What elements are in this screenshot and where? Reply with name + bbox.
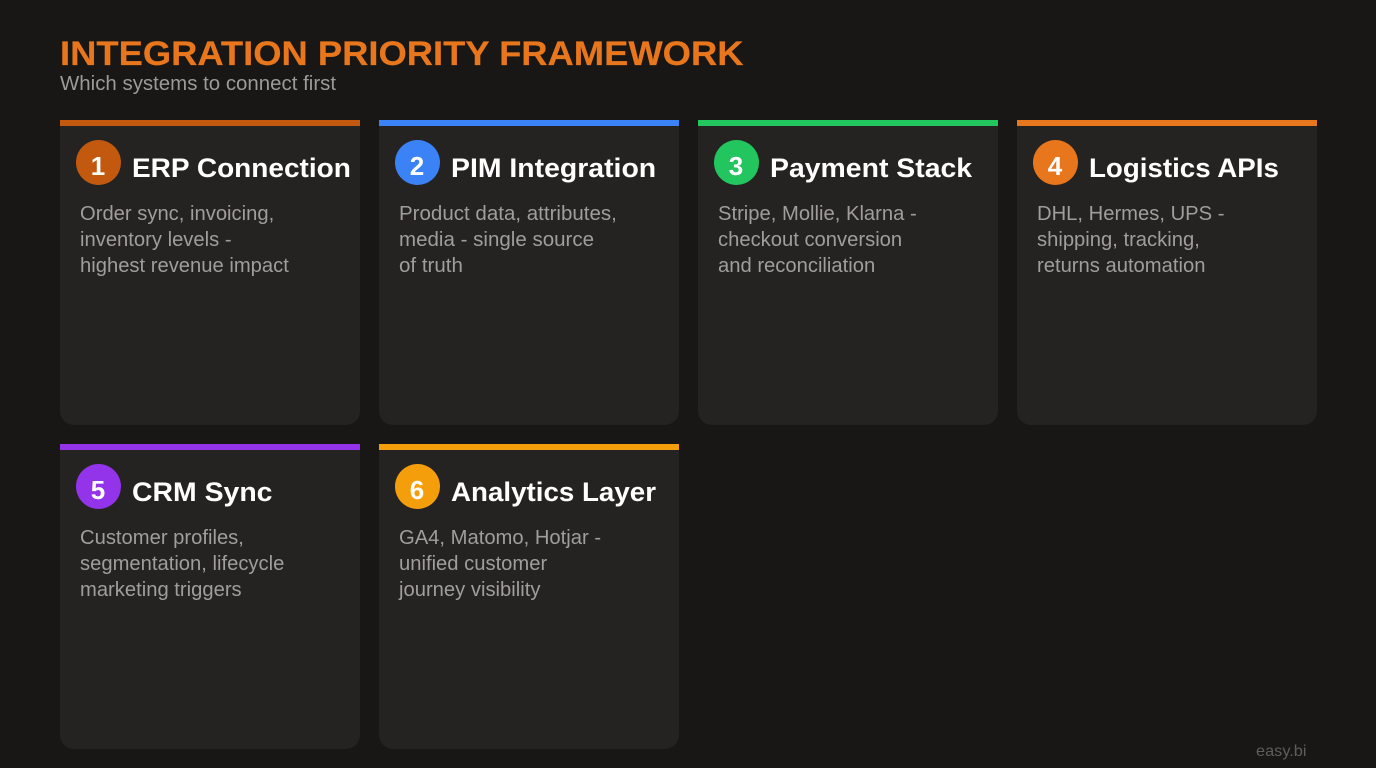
panel: ERP Connection xyxy=(60,120,360,425)
text: Analytics description: journey visibility xyxy=(399,579,540,601)
panel: CRM Sync xyxy=(60,444,360,749)
text: Payment description: and reconciliation xyxy=(718,255,875,277)
text: PIM description: media - single source xyxy=(399,229,594,251)
text: CRM description: segmentation, lifecycle xyxy=(80,553,284,575)
brand mark: easy.bi xyxy=(1256,743,1307,760)
title: INTEGRATION PRIORITY FRAMEWORK xyxy=(60,35,743,73)
icon: number 5 xyxy=(76,464,121,509)
icon: number 4: 4 xyxy=(1048,151,1062,181)
panel: Analytics Layer xyxy=(379,444,679,749)
text: ERP description: Order sync, invoicing, xyxy=(80,203,274,225)
text: Logistics description: shipping, tracking, xyxy=(1037,229,1200,251)
text: Logistics description xyxy=(1037,203,1224,277)
icon: number 4 xyxy=(1033,140,1078,185)
icon: number 2 xyxy=(395,140,440,185)
panel: Payment Stack xyxy=(698,120,998,425)
text: Payment description xyxy=(718,203,917,277)
panel: PIM Integration xyxy=(379,120,679,425)
icon: number 3: 3 xyxy=(729,151,743,181)
text: PIM description xyxy=(399,203,617,277)
icon: number 1 xyxy=(76,140,121,185)
text: ERP description xyxy=(80,203,289,277)
subtitle: Which systems to connect first xyxy=(60,73,336,95)
text: ERP description: highest revenue impact xyxy=(80,255,289,277)
icon: number 5: 5 xyxy=(91,475,105,505)
heading: Payment Stack: Payment Stack xyxy=(770,153,972,183)
heading: PIM Integration: PIM Integration xyxy=(451,153,656,183)
text: CRM description xyxy=(80,527,284,601)
icon: number 2: 2 xyxy=(410,151,424,181)
text: Analytics description xyxy=(398,527,601,601)
text: Analytics description: GA4, Matomo, Hotjar - xyxy=(399,527,601,549)
heading: ERP Connection: ERP Connection xyxy=(132,153,351,183)
icon: number 1: 1 xyxy=(91,151,105,181)
text: Payment description: Stripe, Mollie, Klarna - xyxy=(718,203,917,225)
text: CRM description: Customer profiles, xyxy=(80,527,244,549)
text: Payment description: checkout conversion xyxy=(718,229,902,251)
text: ERP description: inventory levels - xyxy=(80,229,232,251)
heading: Analytics Layer: Analytics Layer xyxy=(451,477,656,507)
text: CRM description: marketing triggers xyxy=(80,579,242,601)
heading: Logistics APIs: Logistics APIs xyxy=(1089,153,1279,183)
text: Analytics description: unified customer xyxy=(399,553,547,575)
panel: Logistics APIs xyxy=(1017,120,1317,425)
text: Logistics description: returns automation xyxy=(1037,255,1205,277)
icon: number 6: 6 xyxy=(410,475,424,505)
text: Logistics description: DHL, Hermes, UPS - xyxy=(1037,203,1224,225)
text: PIM description: Product data, attributes, xyxy=(399,203,617,225)
icon: number 3 xyxy=(714,140,759,185)
icon: number 6 xyxy=(395,464,440,509)
text: PIM description: of truth xyxy=(399,255,463,277)
heading: CRM Sync: CRM Sync xyxy=(132,477,272,507)
